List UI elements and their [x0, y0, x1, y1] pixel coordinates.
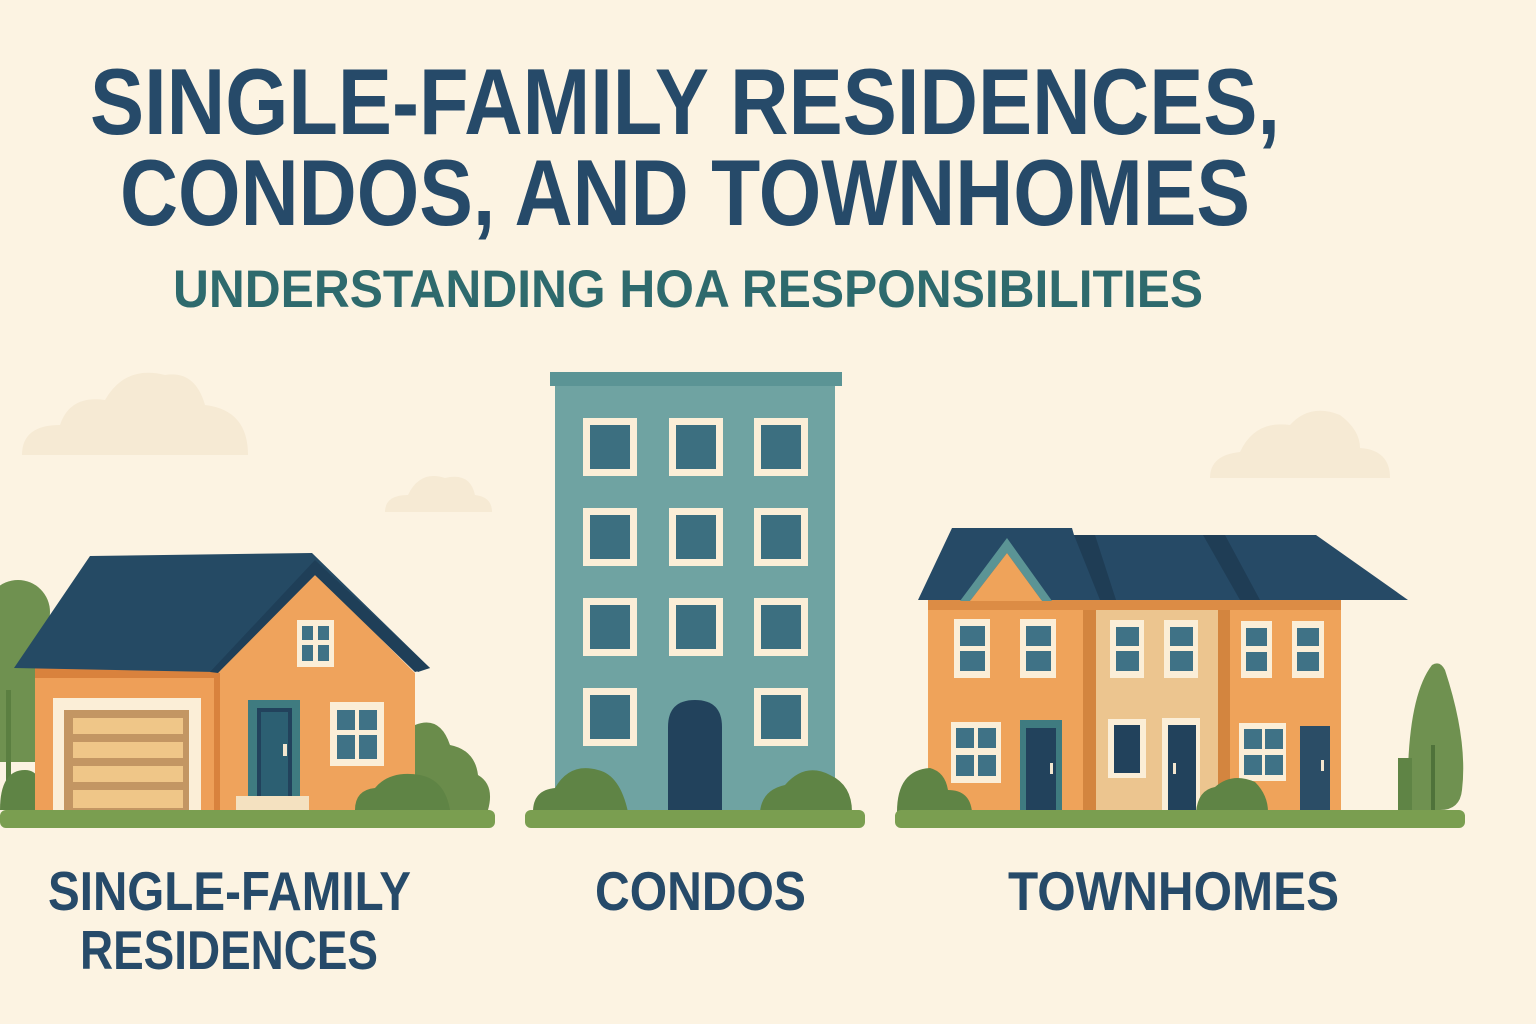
label: single-family residences — [48, 860, 411, 981]
illustration: single-family house — [0, 553, 495, 828]
illustration: townhomes — [895, 528, 1465, 828]
label: single-family residences: RESIDENCES — [80, 919, 378, 981]
label: condos: CONDOS — [595, 860, 806, 922]
title: CONDOS, AND TOWNHOMES — [120, 140, 1250, 245]
label: townhomes: TOWNHOMES — [1008, 860, 1339, 922]
subtitle: UNDERSTANDING HOA RESPONSIBILITIES — [173, 260, 1203, 319]
illustration: condo building — [525, 372, 865, 828]
title: SINGLE-FAMILY RESIDENCES, — [90, 49, 1280, 154]
title — [90, 49, 1280, 245]
label: single-family residences: SINGLE-FAMILY — [48, 860, 411, 922]
clouds — [22, 373, 1390, 512]
